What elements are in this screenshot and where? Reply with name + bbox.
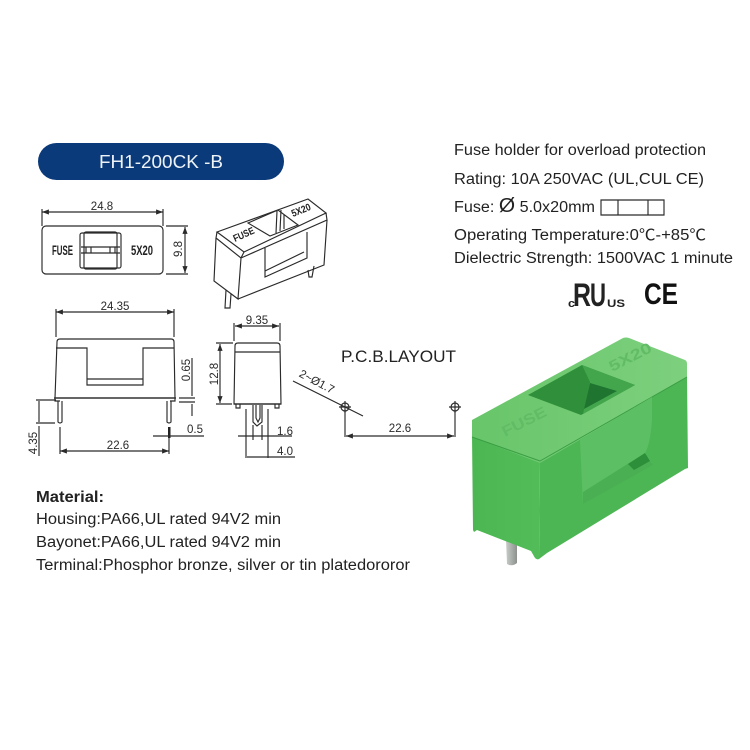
icon: UL certification mark: US: [607, 298, 625, 310]
dimension: 4.0: 4.0: [277, 446, 293, 458]
top face: [472, 338, 687, 463]
spec line: fuse size: Fuse: Ø 5.0x20mm: [454, 195, 595, 217]
icon: fuse symbol: [601, 200, 664, 215]
spec line: operating temperature: Operating Temperature:0℃-+85℃: [454, 227, 706, 244]
dimension: 22.6: 22.6: [107, 440, 129, 452]
dimension: 4.35: 4.35: [28, 432, 40, 454]
material line: terminal: Terminal:Phosphor bronze, silver or tin platedororor: [36, 557, 410, 574]
drawing: side view with dimensions: [209, 315, 295, 458]
dimension: 22.6: 22.6: [389, 423, 411, 435]
right face: [539, 377, 688, 559]
spec line: rating: Rating: 10A 250VAC (UL,CUL CE): [454, 171, 704, 188]
window opening: [528, 365, 635, 415]
embossed label: FUSE: FUSE: [499, 404, 550, 441]
material heading: Material:: [36, 489, 104, 506]
top view label: FUSE: FUSE: [52, 242, 73, 258]
dimension: 0.5: 0.5: [187, 424, 203, 436]
icon: CE mark: CE: [644, 278, 678, 311]
spec line: dielectric strength: Dielectric Strength: 1500VAC 1 minute: [454, 250, 733, 267]
dimension: 24.8: 24.8: [91, 201, 113, 213]
dimension: 2-Ø1.7: 2~Ø1.7: [297, 368, 336, 397]
icon: UL certification mark: R: [573, 277, 591, 313]
dimension: 1.6: 1.6: [277, 426, 293, 438]
photo: green fuse holder: [472, 338, 688, 565]
dimension: 0.65: 0.65: [181, 359, 193, 381]
drawing: isometric outline view: [214, 199, 327, 308]
icon: UL certification mark: c: [568, 298, 575, 310]
dimension: 9.35: 9.35: [246, 315, 268, 327]
dimension: 9.8: 9.8: [173, 241, 185, 257]
material text: [36, 489, 410, 574]
specifications text: [454, 142, 733, 267]
spec line: description: Fuse holder for overload protection: [454, 142, 706, 159]
dimension: 24.35: 24.35: [101, 301, 129, 313]
material line: bayonet: Bayonet:PA66,UL rated 94V2 min: [36, 534, 281, 551]
drawing: top view with dimensions: [42, 201, 188, 274]
top view label: 5X20: 5X20: [131, 242, 153, 258]
drawing: P.C.B. layout: [293, 348, 461, 437]
iso label: FUSE: FUSE: [232, 226, 257, 245]
drawing: front view with dimensions: [28, 301, 204, 456]
icon: UL certification mark: U: [590, 277, 606, 313]
terminal pin: [506, 540, 517, 565]
iso label: 5X20: 5X20: [290, 202, 313, 220]
material line: housing: Housing:PA66,UL rated 94V2 min: [36, 511, 281, 528]
heading: P.C.B.LAYOUT: P.C.B.LAYOUT: [341, 348, 456, 366]
dimension: 12.8: 12.8: [209, 363, 221, 385]
left face: [472, 436, 540, 559]
title pill: [38, 143, 284, 180]
title pill: FH1-200CK -B: [99, 152, 223, 172]
bayonet recess: [580, 397, 652, 504]
icon: UL certification mark: [568, 277, 625, 313]
embossed label: 5X20: 5X20: [606, 340, 655, 376]
